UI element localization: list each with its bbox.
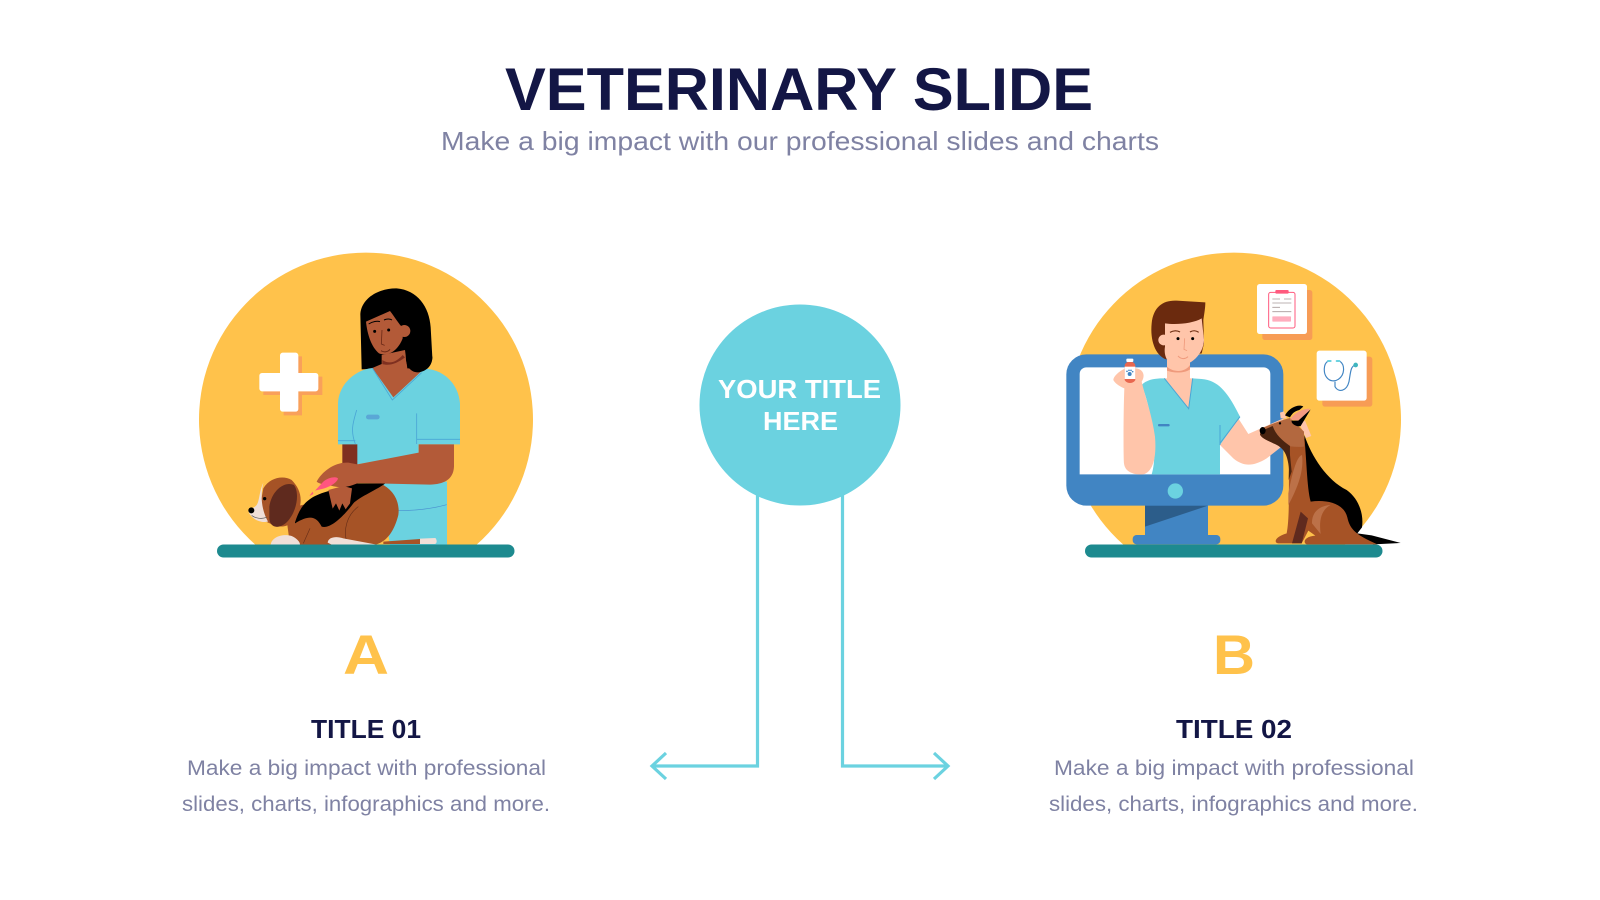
centre title line 1: YOUR TITLE	[718, 374, 881, 404]
table B	[1085, 544, 1382, 558]
centre circle with title	[700, 304, 900, 506]
panel: section A text	[182, 623, 550, 816]
arrow: right	[842, 495, 948, 779]
vet man	[1113, 301, 1285, 474]
icon: medicine bottle	[1125, 359, 1135, 383]
description A line 2: slides, charts, infographics and more.	[182, 793, 550, 816]
icon: stethoscope card	[1317, 351, 1372, 407]
illustration B: telehealth vet with shepherd dog	[1066, 253, 1401, 545]
description A line 1: Make a big impact with professional	[187, 757, 546, 780]
vet near arm and syringe	[309, 444, 454, 511]
hand on dog head	[1280, 411, 1311, 438]
dog body	[1276, 435, 1377, 544]
letter B: B	[1213, 623, 1255, 686]
heading: title 02: TITLE 02	[1176, 714, 1292, 744]
yellow backdrop circle A	[199, 253, 533, 545]
dog head	[1260, 406, 1311, 473]
illustration A: vet with beagle	[199, 253, 533, 545]
centre title line 2: HERE	[763, 406, 838, 436]
letter A: A	[343, 623, 389, 686]
panel: section B text	[1049, 623, 1418, 816]
beagle dog	[248, 477, 437, 545]
description B line 1: Make a big impact with professional	[1054, 757, 1414, 780]
yellow backdrop circle B	[1067, 253, 1401, 545]
monitor	[1066, 354, 1283, 506]
icon: medical cross	[259, 353, 322, 415]
shepherd dog	[1260, 406, 1401, 544]
dog black back and tail	[1304, 435, 1401, 544]
table A	[217, 544, 514, 558]
dog markings	[1288, 448, 1331, 543]
subtitle: Make a big impact with our professional slides and charts	[441, 126, 1159, 156]
vet woman	[338, 288, 460, 545]
icon: clipboard card	[1257, 284, 1312, 340]
heading: title 01: TITLE 01	[311, 714, 421, 744]
description B line 2: slides, charts, infographics and more.	[1049, 793, 1418, 816]
title: VETERINARY SLIDE	[505, 56, 1093, 123]
monitor stand	[1133, 503, 1220, 544]
arrow: left	[652, 495, 758, 779]
